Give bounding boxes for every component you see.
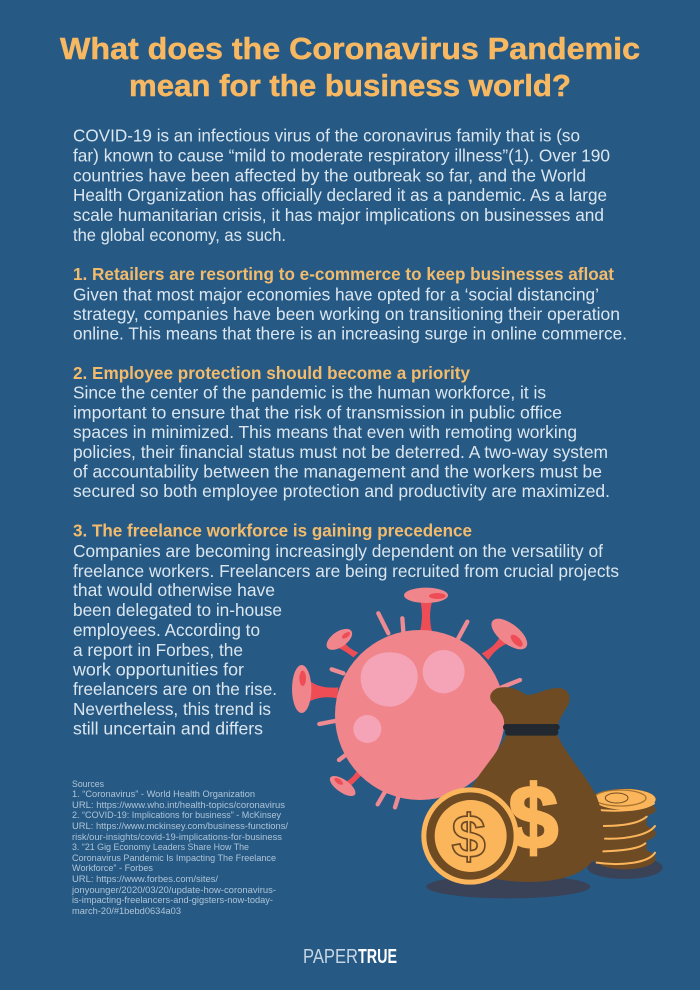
text block: section 3 body: work opportunities for xyxy=(72,660,244,680)
icon: dollar sign on bag: $ xyxy=(508,768,558,868)
text block: introduction: far) known to cause “mild to moderate respiratory illness”(1). Over 190 xyxy=(73,146,610,166)
text block: section 3 body: Companies are becoming increasingly dependent on the versatility of xyxy=(73,541,603,561)
text block: section 3 body: a report in Forbes, the xyxy=(73,640,243,660)
text block: introduction: COVID-19 is an infectious virus of the coronavirus family that is (so xyxy=(73,126,580,146)
text block: introduction: countries have been affected by the outbreak so far, and the World xyxy=(73,166,586,186)
title: What does the Coronavirus Pandemic xyxy=(60,31,640,66)
title: mean for the business world? xyxy=(129,68,571,103)
text block: section 2 body: spaces in minimized. This means that even with remoting working xyxy=(73,422,577,442)
text block: section 2 body xyxy=(73,382,610,501)
text block: section 3 body: freelancers are on the rise. xyxy=(73,679,277,699)
heading: section 2: 2. Employee protection should become a priority xyxy=(73,363,470,383)
text block: section 2 body: policies, their financial status must not be deterred. A two-way system xyxy=(73,442,608,462)
text block: sources: is-impacting-freelancers-and-gigsters-now-today- xyxy=(72,895,273,906)
text block: sources: URL: https://www.who.int/health-topics/coronavirus xyxy=(72,800,285,811)
text block: section 2 body: secured so both employee protection and productivity are maximized. xyxy=(73,481,610,501)
text block: section 2 body: important to ensure that the risk of transmission in public office xyxy=(73,402,562,422)
text block: sources: march-20/#1bebd0634a03 xyxy=(72,906,181,917)
logo: Paper True: PAPER xyxy=(303,946,358,968)
text block: sources: Workforce” - Forbes xyxy=(72,863,153,874)
icon: gold coin: $ xyxy=(452,802,486,871)
text block: sources: Coronavirus Pandemic Is Impacting The Freelance xyxy=(72,853,276,864)
icon: gold coin xyxy=(421,787,519,885)
logo: Paper True: TRUE xyxy=(358,946,397,968)
text block: section 2 body: of accountability between the management and the workers must be xyxy=(73,462,602,482)
text block: sources: Sources xyxy=(72,779,104,790)
text block: introduction: the global economy, as such. xyxy=(73,225,286,245)
text block: section 3 body: freelance workers. Freelancers are being recruited from crucial projects xyxy=(73,561,619,581)
heading: section 3: 3. The freelance workforce is gaining precedence xyxy=(73,520,472,540)
section 2: employee protection xyxy=(73,363,610,501)
section 1: e-commerce xyxy=(73,264,627,344)
text block: sources: URL: https://www.mckinsey.com/business-functions/ xyxy=(72,821,288,832)
text block: sources: 1. “Coronavirus” - World Health Organization xyxy=(72,789,255,800)
text block: sources: jonyounger/2020/03/20/update-how-coronavirus- xyxy=(71,885,276,896)
illustration: virus and money xyxy=(292,588,663,898)
text block: section 3 body: still uncertain and differs xyxy=(73,718,263,738)
text block: sources xyxy=(71,779,288,917)
icon: money bag xyxy=(426,687,603,898)
text block: section 3 body: employees. According to xyxy=(73,620,260,640)
text block: introduction xyxy=(73,126,610,245)
text block: sources: risk/our-insights/covid-19-implications-for-business xyxy=(72,832,282,843)
text block: section 1 body: Given that most major economies have opted for a ‘social distancing’ xyxy=(73,284,599,304)
text block: sources: 2. “COVID-19: Implications for business” - McKinsey xyxy=(72,810,281,821)
section 3: freelance workforce xyxy=(72,520,619,738)
text block: section 3 body: Nevertheless, this trend is xyxy=(73,699,271,719)
text block: sources: 3. “21 Gig Economy Leaders Share How The xyxy=(72,842,249,853)
text block: introduction: scale humanitarian crisis, it has major implications on businesses and xyxy=(73,205,604,225)
text block: section 3 body: been delegated to in-house xyxy=(73,600,282,620)
text block: section 2 body: Since the center of the pandemic is the human workforce, it is xyxy=(73,382,546,402)
text block: introduction: Health Organization has officially declared it as a pandemic. As a large xyxy=(73,185,607,205)
heading: section 1: 1. Retailers are resorting to e-commerce to keep businesses afloat xyxy=(73,264,614,284)
text block: section 3 body xyxy=(72,541,619,738)
text block: sources: URL: https://www.forbes.com/sites/ xyxy=(72,874,218,885)
icon: coronavirus xyxy=(292,588,532,807)
text block: section 1 body: online. This means that there is an increasing surge in online commerce. xyxy=(73,324,627,344)
title xyxy=(60,31,640,103)
text block: section 1 body xyxy=(73,284,627,344)
text block: section 3 body: that would otherwise have xyxy=(73,580,275,600)
icon: coin stack xyxy=(587,789,663,879)
text block: section 1 body: strategy, companies have been working on transitioning their operation xyxy=(73,304,620,324)
